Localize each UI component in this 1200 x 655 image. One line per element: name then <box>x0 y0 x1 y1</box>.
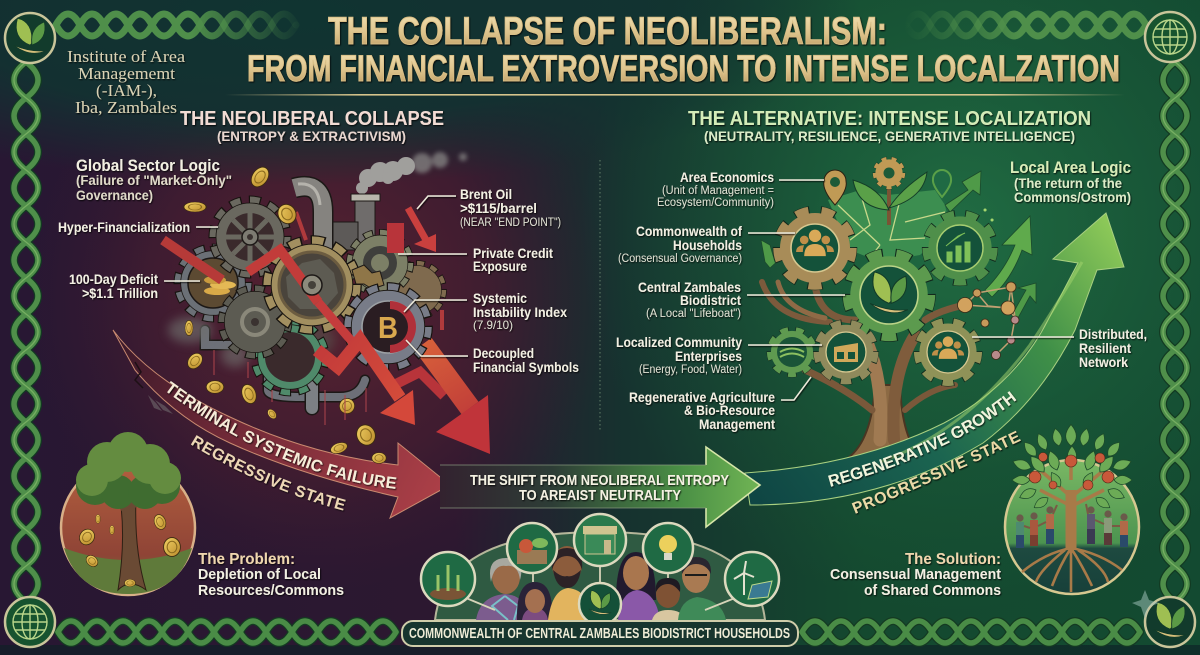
shift arrow text <box>470 473 729 504</box>
label: 100-day deficit <box>69 271 200 301</box>
shift arrow text: TO AREAIST NEUTRALITY <box>519 488 681 504</box>
community group <box>402 514 798 646</box>
lower pipes <box>205 330 365 408</box>
label: the solution: of Shared Commons <box>864 582 1001 599</box>
institute credit: Institute of Area <box>67 47 185 66</box>
left panel heading <box>180 108 444 144</box>
label: regenerative agriculture: Regenerative Agriculture <box>629 389 775 405</box>
leaf canopy <box>1011 424 1133 511</box>
corner medallion: top-left leaf <box>5 13 55 63</box>
label: global sector logic: Governance) <box>76 187 153 203</box>
smoke patches <box>168 317 335 367</box>
red zigzag: upper segment <box>163 240 222 280</box>
label: commonwealth of households: Commonwealth of <box>636 223 742 239</box>
corner medallion: bottom-right leaf <box>1132 590 1195 647</box>
label: regenerative agriculture: & Bio-Resource <box>684 402 775 418</box>
icon circle: central leaf <box>579 583 621 625</box>
red arrow: top right <box>408 208 436 252</box>
label: central zambales biodistrict: Biodistrict <box>680 292 741 308</box>
label: distributed network: Resilient <box>1079 340 1131 356</box>
label: local area logic: (The return of the <box>1014 175 1122 191</box>
icon circle: wind and solar <box>725 552 779 606</box>
terminal failure curved arrow <box>113 330 450 518</box>
red falling line small <box>296 212 442 330</box>
label: regenerative agriculture: Management <box>699 416 775 432</box>
label: systemic instability: Instability Index <box>473 304 567 320</box>
label: localized community enterprises <box>616 334 822 376</box>
label: local area logic: Local Area Logic <box>1010 158 1131 177</box>
gear: enterprise factory <box>817 323 875 381</box>
institute credit: Iba, Zambales <box>75 98 177 117</box>
curved text: regressive state: REGRESSIVE STATE <box>191 435 347 512</box>
red arrowhead: middle <box>380 390 415 425</box>
label: systemic instability: (7.9/10) <box>473 318 513 332</box>
label: brent oil: >$115/barrel <box>460 200 537 216</box>
regenerative growth curved arrow <box>745 213 1124 505</box>
icon circle: bulb <box>643 523 693 573</box>
label: local area logic <box>1010 158 1131 205</box>
label: commonwealth of households <box>618 223 795 265</box>
center dotted divider <box>599 160 601 430</box>
map pin: tan <box>824 170 846 205</box>
network nodes <box>958 282 1019 360</box>
illustration: collapsing gears machine <box>163 152 490 463</box>
label: systemic instability: Systemic <box>473 290 527 306</box>
label: brent oil: (NEAR "END POINT") <box>460 217 561 229</box>
person: boy <box>652 578 686 620</box>
label: the solution: The Solution: <box>905 551 1001 568</box>
label: decoupled symbols: Decoupled <box>473 345 534 361</box>
right panel heading <box>688 108 1091 144</box>
gear: top spoked <box>215 202 285 272</box>
gear: central biodistrict <box>848 254 930 336</box>
label: decoupled symbols <box>406 340 579 375</box>
institute credit: (-IAM-), <box>96 81 157 100</box>
upward arrows <box>761 171 1036 318</box>
icon circle: shop <box>574 514 626 566</box>
label: distributed network: Network <box>1079 354 1128 370</box>
corner medallion: top-right globe <box>1145 12 1195 62</box>
red zigzag: main descent <box>248 250 400 398</box>
person: grey-haired woman <box>476 558 523 620</box>
label: private credit: Private Credit <box>473 245 553 261</box>
person: bearded man <box>548 546 590 620</box>
medallion: dying tree <box>61 432 195 595</box>
label: decoupled symbols: Financial Symbols <box>473 359 579 375</box>
label: localized community enterprises: (Energy, Food, Water) <box>639 364 742 376</box>
label: localized community enterprises: Enterprises <box>675 348 742 364</box>
map pin: green <box>933 170 951 197</box>
title: THE COLLAPSE OF NEOLIBERALISM: <box>328 10 887 53</box>
gear hub <box>302 275 322 295</box>
title rule <box>225 94 1125 96</box>
rust fragments <box>352 265 384 289</box>
connector lines <box>466 566 735 610</box>
brown rear gear <box>392 265 442 315</box>
falling coins <box>184 164 386 463</box>
label: private credit: Exposure <box>473 258 527 274</box>
label: localized community enterprises: Localized Community <box>616 334 742 350</box>
label: 100-day deficit: 100-Day Deficit <box>69 271 158 287</box>
label: the solution <box>830 551 1001 599</box>
gear: central brass <box>270 243 354 327</box>
person: woman in purple <box>616 552 660 620</box>
label: the problem: Resources/Commons <box>198 582 344 599</box>
right panel heading: (NEUTRALITY, RESILIENCE, GENERATIVE INTELLIGENCE) <box>704 128 1075 144</box>
map canopy <box>828 190 950 262</box>
label: area economics <box>657 169 824 209</box>
icon circle: crate <box>507 523 557 573</box>
label: global sector logic: (Failure of "Market-Only" <box>76 172 232 188</box>
label: the problem <box>198 551 344 599</box>
shift arrow text: THE SHIFT FROM NEOLIBERAL ENTROPY <box>470 473 729 489</box>
label: private credit <box>398 245 553 274</box>
elbow pipe <box>294 184 323 250</box>
title <box>247 10 1120 89</box>
label: the problem: The Problem: <box>198 551 295 568</box>
label: area economics: Area Economics <box>680 169 774 185</box>
label: systemic instability <box>404 290 567 332</box>
gear: tan households <box>778 211 852 285</box>
corner medallion: bottom-left globe <box>5 597 55 647</box>
gear: right green growth <box>927 215 993 281</box>
label: local area logic: Commons/Ostrom) <box>1014 189 1131 205</box>
label: the solution: Consensual Management <box>830 566 1001 583</box>
gear: bitcoin <box>350 289 426 365</box>
smoke and chimney <box>333 152 467 250</box>
central shift arrow <box>440 447 760 527</box>
gear: lower-left grey <box>224 290 286 354</box>
label: global sector logic: Global Sector Logic <box>76 156 220 175</box>
banner: commonwealth <box>402 621 798 646</box>
green lower gear <box>257 324 323 390</box>
label: regenerative agriculture <box>629 377 811 432</box>
person: girl <box>517 582 552 620</box>
label: brent oil <box>417 186 561 229</box>
illustration: regenerative tree of gears <box>761 159 1036 458</box>
left panel heading: (ENTROPY & EXTRACTIVISM) <box>217 128 406 144</box>
tree trunk and branches <box>762 282 965 458</box>
green decor dots <box>985 210 992 220</box>
right panel heading: THE ALTERNATIVE: INTENSE LOCALIZATION <box>688 108 1091 130</box>
bitcoin symbol: B <box>378 310 398 345</box>
label: area economics: (Unit of Management = <box>662 185 774 197</box>
gear: distributed people <box>918 322 978 382</box>
label: distributed network: Distributed, <box>1079 326 1147 342</box>
icon circle: plant <box>421 552 475 606</box>
left panel heading: THE NEOLIBERAL COLLAPSE <box>180 108 444 130</box>
banner: commonwealth: COMMONWEALTH OF CENTRAL ZAMBALES BIODISTRICT HOUSEHOLDS <box>409 626 790 642</box>
label: distributed network <box>972 326 1147 370</box>
curved text: terminal systemic failure: TERMINAL SYSTEMIC FAILURE <box>167 381 398 491</box>
label: central zambales biodistrict: (A Local "Lifeboat") <box>646 308 741 320</box>
institute credit: Managememt <box>78 64 175 83</box>
person: man with glasses <box>678 557 726 620</box>
label: commonwealth of households: (Consensual Governance) <box>618 253 742 265</box>
label: global sector logic <box>76 156 232 203</box>
label: commonwealth of households: Households <box>673 237 742 253</box>
gear: left with coin pile <box>180 250 246 316</box>
tree trunk and roots <box>1022 452 1122 592</box>
medallion: thriving tree <box>1005 424 1139 594</box>
institute credit <box>67 47 185 117</box>
arch <box>435 532 765 620</box>
group of people <box>1016 504 1128 548</box>
label: hyper-financialization: Hyper-Financialization <box>58 219 190 235</box>
label: 100-day deficit: >$1.1 Trillion <box>82 285 158 301</box>
sapling and top gear <box>853 159 927 225</box>
label: brent oil: Brent Oil <box>460 186 512 202</box>
label: central zambales biodistrict <box>638 279 845 320</box>
curved text: progressive state: PROGRESSIVE STATE <box>852 430 1022 515</box>
debris drips <box>214 350 366 425</box>
red banner block <box>387 223 404 253</box>
curved text: regenerative growth: REGENERATIVE GROWTH <box>828 391 1018 488</box>
gear: small green farm <box>770 330 814 374</box>
label: central zambales biodistrict: Central Zambales <box>638 279 741 295</box>
gear: olive right <box>351 234 409 292</box>
label: area economics: Ecosystem/Community) <box>657 197 774 209</box>
red zigzag: right large <box>392 344 490 454</box>
label: the problem: Depletion of Local <box>198 566 321 583</box>
